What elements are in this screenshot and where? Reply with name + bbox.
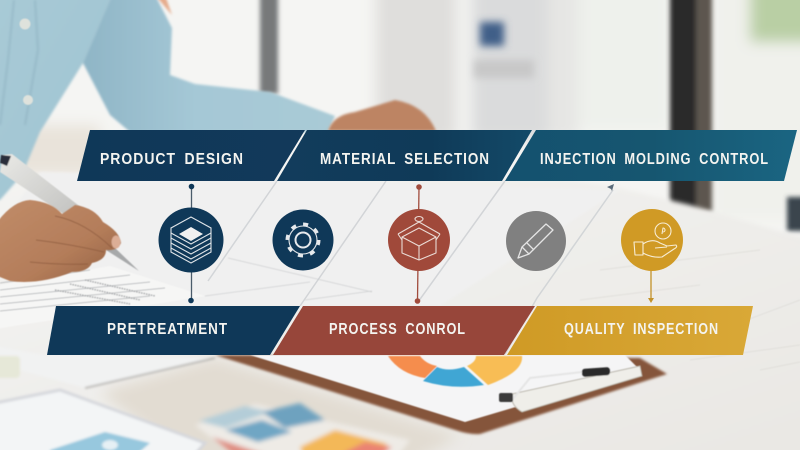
clipboard with donut chart xyxy=(215,355,667,434)
donut chart xyxy=(388,356,522,387)
banner: pretreatment: PRETREATMENT xyxy=(107,321,228,338)
writing pen xyxy=(0,154,139,271)
top row banners xyxy=(77,130,797,181)
banner: process conrol: PROCESS CONROL xyxy=(329,321,466,338)
marble desk veins xyxy=(580,250,800,370)
banner: quality inspection: QUALITY INSPECTION xyxy=(564,321,719,338)
diagonal guide lines xyxy=(208,181,613,354)
lower left papers xyxy=(0,345,215,450)
beige tabletop band xyxy=(100,358,460,450)
printed table lines on sheet xyxy=(0,258,372,311)
writing hand xyxy=(0,200,121,282)
connector: product design to pretreatment xyxy=(188,184,194,303)
desk surface xyxy=(0,175,800,450)
connector: material selection to process control xyxy=(415,184,422,304)
banner: quality inspection xyxy=(507,306,753,355)
arrow head: diagonal guide xyxy=(607,184,614,191)
banner: product design xyxy=(77,130,305,181)
connector: arrow to quality inspection xyxy=(648,270,654,303)
left hand on desk xyxy=(328,100,436,131)
banner: pretreatment xyxy=(47,306,300,355)
bottom row banners xyxy=(47,306,753,355)
banner: injection molding control xyxy=(505,130,797,181)
icon: pencil xyxy=(506,211,566,271)
banner: material selection xyxy=(277,130,532,181)
dark window pillar xyxy=(670,0,800,231)
banner: process conrol xyxy=(273,306,535,355)
clipboard clip xyxy=(499,366,642,412)
shirt buttons xyxy=(20,18,33,105)
icon: layered stack xyxy=(158,208,224,272)
window and wall backdrop xyxy=(0,0,800,240)
banner: product design: PRODUCT DESIGN xyxy=(100,151,244,168)
banner: material selection: MATERIAL SELECTION xyxy=(320,151,490,168)
blurred wall details xyxy=(260,0,534,94)
person shirt xyxy=(0,0,335,200)
icon: gear xyxy=(272,210,334,270)
icon: open box xyxy=(388,209,450,271)
colour swatch card xyxy=(195,403,410,450)
icon: hand holding coin xyxy=(621,209,683,271)
blueprint sheet xyxy=(0,172,620,330)
